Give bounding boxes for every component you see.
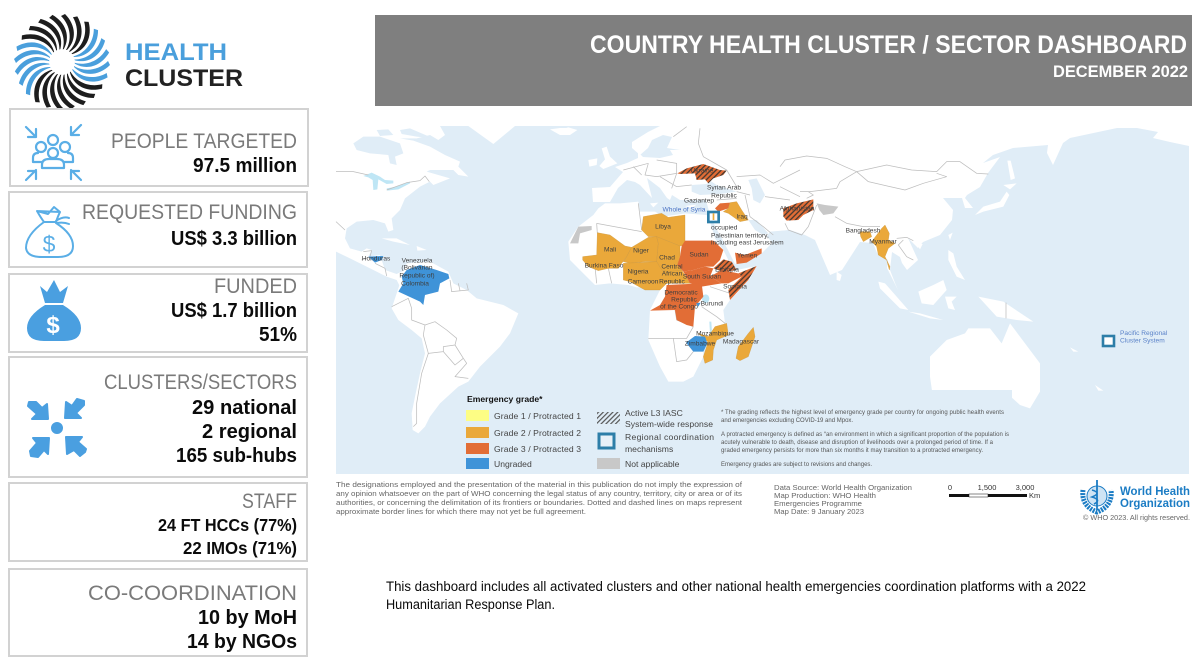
- scale bar: [948, 483, 1040, 500]
- map country labels: Yemen: [737, 252, 757, 260]
- legend: [458, 390, 1012, 474]
- map countries: Americas, Africa and Middle East: [368, 164, 762, 363]
- country: Nigeria, Cameroon, Central African Republic: [623, 262, 690, 290]
- map country labels: including east Jerusalem: [711, 240, 784, 246]
- map country labels: Republic: [711, 192, 738, 200]
- map country labels: Ethiopia: [715, 266, 739, 274]
- country: Myanmar: [872, 225, 895, 270]
- map seas and islands: Eurasia detail: [560, 127, 800, 243]
- country: Democratic Republic of the Congo: [650, 283, 703, 327]
- logo wordmark: CLUSTER: CLUSTER: [125, 65, 243, 92]
- heading: funded: FUNDED: [214, 275, 297, 298]
- country: Afghanistan: [783, 199, 813, 221]
- map country labels: Somalia: [723, 284, 747, 290]
- country: Colombia and Venezuela: [398, 265, 449, 305]
- map source information: Map Production: WHO Health: [774, 491, 876, 500]
- legend footnotes: Emergency grades are subject to revisions and changes.: [721, 462, 872, 468]
- country: Mali and Burkina Faso: [583, 233, 632, 271]
- map land: Africa: [568, 202, 757, 382]
- heading: co-coordination: CO-COORDINATION: [88, 582, 297, 605]
- value: IMOs: 22 IMOs (71%): [183, 538, 297, 558]
- legend item: not applicable: [597, 458, 680, 469]
- value: 10 by MoH: 10 by MoH: [198, 607, 297, 629]
- panel: co-coordination: [9, 569, 307, 656]
- map country labels: Libya: [655, 224, 671, 230]
- icon: WHO emblem: [1083, 480, 1111, 512]
- value: 14 by NGOs: 14 by NGOs: [187, 631, 297, 653]
- icon: spiral logo mark: [13, 13, 111, 111]
- icon: filled money bag: [27, 280, 81, 341]
- map country labels: Myanmar: [869, 238, 898, 246]
- map country labels: Afghanistan: [780, 206, 815, 212]
- map country labels: Nigeria: [628, 268, 649, 276]
- legend item: grade 2: [466, 427, 581, 438]
- map country labels: Central: [661, 264, 683, 270]
- icon: money bag outline: $: [43, 231, 56, 257]
- map country labels: occupied: [711, 224, 738, 232]
- value: 2 regional: 2 regional: [202, 421, 297, 443]
- map country labels: Palestinian territory,: [711, 232, 769, 240]
- date: DECEMBER 2022: [1053, 62, 1188, 81]
- map country labels: Mali: [604, 246, 617, 254]
- heading: staff: STAFF: [242, 490, 297, 513]
- WHO wordmark: World Health: [1120, 486, 1190, 498]
- map country labels: Cameroon: [628, 278, 659, 286]
- panel: staff: [9, 483, 307, 561]
- legend item: regional coordination: mechanisms: [625, 444, 673, 454]
- value: 51%: 51%: [259, 324, 297, 346]
- icon: four arrows converging on a dot: [28, 399, 86, 457]
- icon: money bag outline: [26, 207, 73, 257]
- country: Burundi: [696, 303, 701, 307]
- country: Mozambique: [698, 323, 728, 363]
- logo wordmark: HEALTH: HEALTH: [125, 39, 227, 66]
- panel: clusters and sectors: [9, 357, 307, 477]
- value: 97.5 million: 97.5 million: [193, 155, 297, 177]
- WHO logo: [1083, 480, 1190, 522]
- value: US$ 3.3 billion: US$ 3.3 billion: [171, 228, 297, 250]
- note text: This dashboard includes all activated clusters and other national health emergencies coordination platforms with a 2022: [386, 579, 1086, 594]
- map country labels: Burundi: [701, 300, 724, 308]
- marker: Whole of Syria regional coordination square: [708, 212, 719, 222]
- heading: requested funding: REQUESTED FUNDING: [82, 201, 297, 224]
- map country labels: Whole of Syria: [663, 206, 706, 214]
- map land: Asia Pacific islands and Australia: [837, 161, 1103, 408]
- legend heading: Emergency grade*: [467, 394, 543, 404]
- scale bar: 1,500: [978, 483, 996, 492]
- map country labels: Chad: [659, 254, 675, 262]
- country: Yemen: [735, 248, 762, 264]
- marker: Pacific Regional Cluster System: [1103, 330, 1168, 346]
- map country labels: Sudan: [689, 252, 709, 258]
- WHO logo: Organization: [1120, 498, 1190, 510]
- copyright: © WHO 2023. All rights reserved.: [1083, 513, 1190, 522]
- legend item: ungraded: Ungraded: [494, 459, 532, 469]
- legend item: grade 3: [466, 443, 581, 454]
- map country labels: Democratic: [664, 290, 698, 296]
- map land: South America: [392, 262, 518, 433]
- territory: Western Sahara: [570, 226, 592, 243]
- legend footnotes: A protracted emergency is defined as “an environment in which a significant proportion of the population is: [721, 432, 1009, 438]
- map country labels: (Bolivarian: [401, 264, 433, 272]
- map source information: [774, 483, 912, 516]
- scale bar: 3,000: [1016, 483, 1034, 492]
- legend footnotes: and emergencies excluding COVID-19 and Mpox.: [721, 418, 853, 424]
- scale bar: 0: [948, 483, 952, 492]
- map country labels: South Sudan: [683, 274, 721, 280]
- disclaimer text: any opinion whatsoever on the part of WHO concerning the legal status of any country, territory, city or area or of its: [336, 489, 742, 498]
- map country labels: Bangladesh: [846, 228, 881, 234]
- value: US$ 1.7 billion: US$ 1.7 billion: [171, 300, 297, 322]
- map country labels: Gaziantep: [684, 198, 714, 204]
- note text: [386, 579, 1086, 612]
- heading: people targeted: PEOPLE TARGETED: [111, 130, 297, 153]
- disclaimer text: The designations employed and the presentation of the material in this publication do not imply the expression of: [336, 480, 743, 489]
- heading: clusters/sectors: CLUSTERS/SECTORS: [104, 371, 297, 394]
- map country labels: Niger: [633, 248, 650, 254]
- disclaimer text: [336, 480, 743, 516]
- country: Iraq: [723, 202, 748, 222]
- icon: people with converging arrows: [26, 125, 81, 180]
- map country labels: of the Congo: [660, 304, 698, 310]
- scale bar: Km: [1029, 491, 1040, 500]
- map country labels: Colombia: [401, 280, 429, 288]
- marker: Pacific Regional Cluster System: Cluster System: [1120, 338, 1165, 344]
- map source information: Data Source: World Health Organization: [774, 483, 912, 492]
- disclaimer text: authorities, or concerning the delimitation of its frontiers or boundaries. Dotted and dashed lines on maps represent: [336, 498, 743, 507]
- legend item: grade 1: Grade 1 / Protracted 1: [494, 411, 581, 421]
- marker: Pacific Regional Cluster System: Pacific Regional: [1120, 330, 1168, 337]
- map country labels: Republic of): [399, 272, 435, 280]
- legend item: regional coordination: Regional coordination: [625, 432, 714, 442]
- legend item: active L3 response: System-wide response: [625, 419, 713, 429]
- world map: [336, 126, 1189, 474]
- value: 29 national: 29 national: [192, 397, 297, 419]
- legend footnotes: graded emergency persists for more than six months it may transition to a protracted emergency.: [721, 448, 983, 454]
- legend item: grade 2: Grade 2 / Protracted 2: [494, 428, 581, 438]
- country: Somalia: [728, 266, 757, 300]
- map source information: Emergencies Programme: [774, 499, 862, 508]
- map borders: Central and South Asia: [780, 156, 988, 235]
- value: 165 sub-hubs: 165 sub-hubs: [176, 445, 297, 467]
- note text: Humanitarian Response Plan.: [386, 597, 555, 612]
- map country labels: Republic: [659, 278, 686, 286]
- map country labels: Burkina Faso: [585, 262, 624, 270]
- country: Niger: [623, 237, 658, 263]
- panel: people targeted: [10, 109, 308, 186]
- map country labels: Zimbabwe: [685, 340, 716, 348]
- country: Ukraine: [677, 164, 727, 183]
- legend footnotes: * The grading reflects the highest level of emergency grade per country for ongoing public health events: [721, 410, 1004, 416]
- panel: requested funding: [9, 192, 307, 267]
- map country labels: [362, 168, 898, 348]
- legend item: active L3 response: [597, 408, 713, 429]
- map country labels: Venezuela: [402, 258, 433, 264]
- disclaimer text: approximate border lines for which there may not yet be full agreement.: [336, 507, 586, 516]
- map country labels: Syrian Arab: [707, 184, 741, 192]
- map land: Eurasia: [592, 126, 1189, 290]
- country: Libya: [642, 213, 685, 246]
- country: South Sudan: [683, 267, 722, 287]
- map country labels: Mozambique: [696, 330, 734, 338]
- legend item: ungraded: [466, 458, 532, 469]
- legend item: not applicable: Not applicable: [625, 459, 680, 469]
- legend item: regional coordination: [599, 432, 714, 454]
- map land: Americas: [336, 126, 570, 287]
- value: full-time HCCs: 24 FT HCCs (77%): [158, 515, 297, 535]
- legend footnotes: [721, 410, 1009, 468]
- country: Chad: [657, 237, 682, 272]
- country: Bangladesh: [860, 232, 872, 242]
- header banner: [375, 15, 1192, 106]
- country: Zimbabwe: [686, 336, 707, 352]
- legend item: active L3 response: Active L3 IASC: [625, 408, 683, 418]
- country: Ethiopia: [710, 270, 742, 283]
- map countries: Asia: [783, 199, 895, 270]
- territory: Kashmir: [817, 203, 838, 215]
- map country labels: Honduras: [362, 256, 391, 262]
- map source information: Map Date: 9 January 2023: [774, 507, 864, 516]
- legend footnotes: acutely vulnerable to death, disease and disruption of livelihoods over a prolonged period of time. If a: [721, 440, 994, 446]
- icon: filled money bag: $: [46, 312, 60, 339]
- map country labels: Iraq: [736, 214, 748, 220]
- country: Syria: [715, 203, 730, 212]
- map country labels: Ukraine: [691, 168, 714, 174]
- logo: Health Cluster: [13, 13, 243, 111]
- country: Madagascar: [736, 327, 755, 361]
- legend item: grade 1: [466, 410, 581, 421]
- legend item: grade 3: Grade 3 / Protracted 3: [494, 444, 581, 454]
- map country labels: African: [662, 270, 683, 278]
- map country labels: Madagascar: [723, 338, 760, 346]
- map country labels: Republic: [671, 296, 698, 304]
- country: Honduras: [368, 256, 383, 263]
- country: Sudan: [677, 241, 723, 272]
- country: Ethiopia hatched north: [713, 259, 737, 272]
- panel: funded: [9, 274, 307, 352]
